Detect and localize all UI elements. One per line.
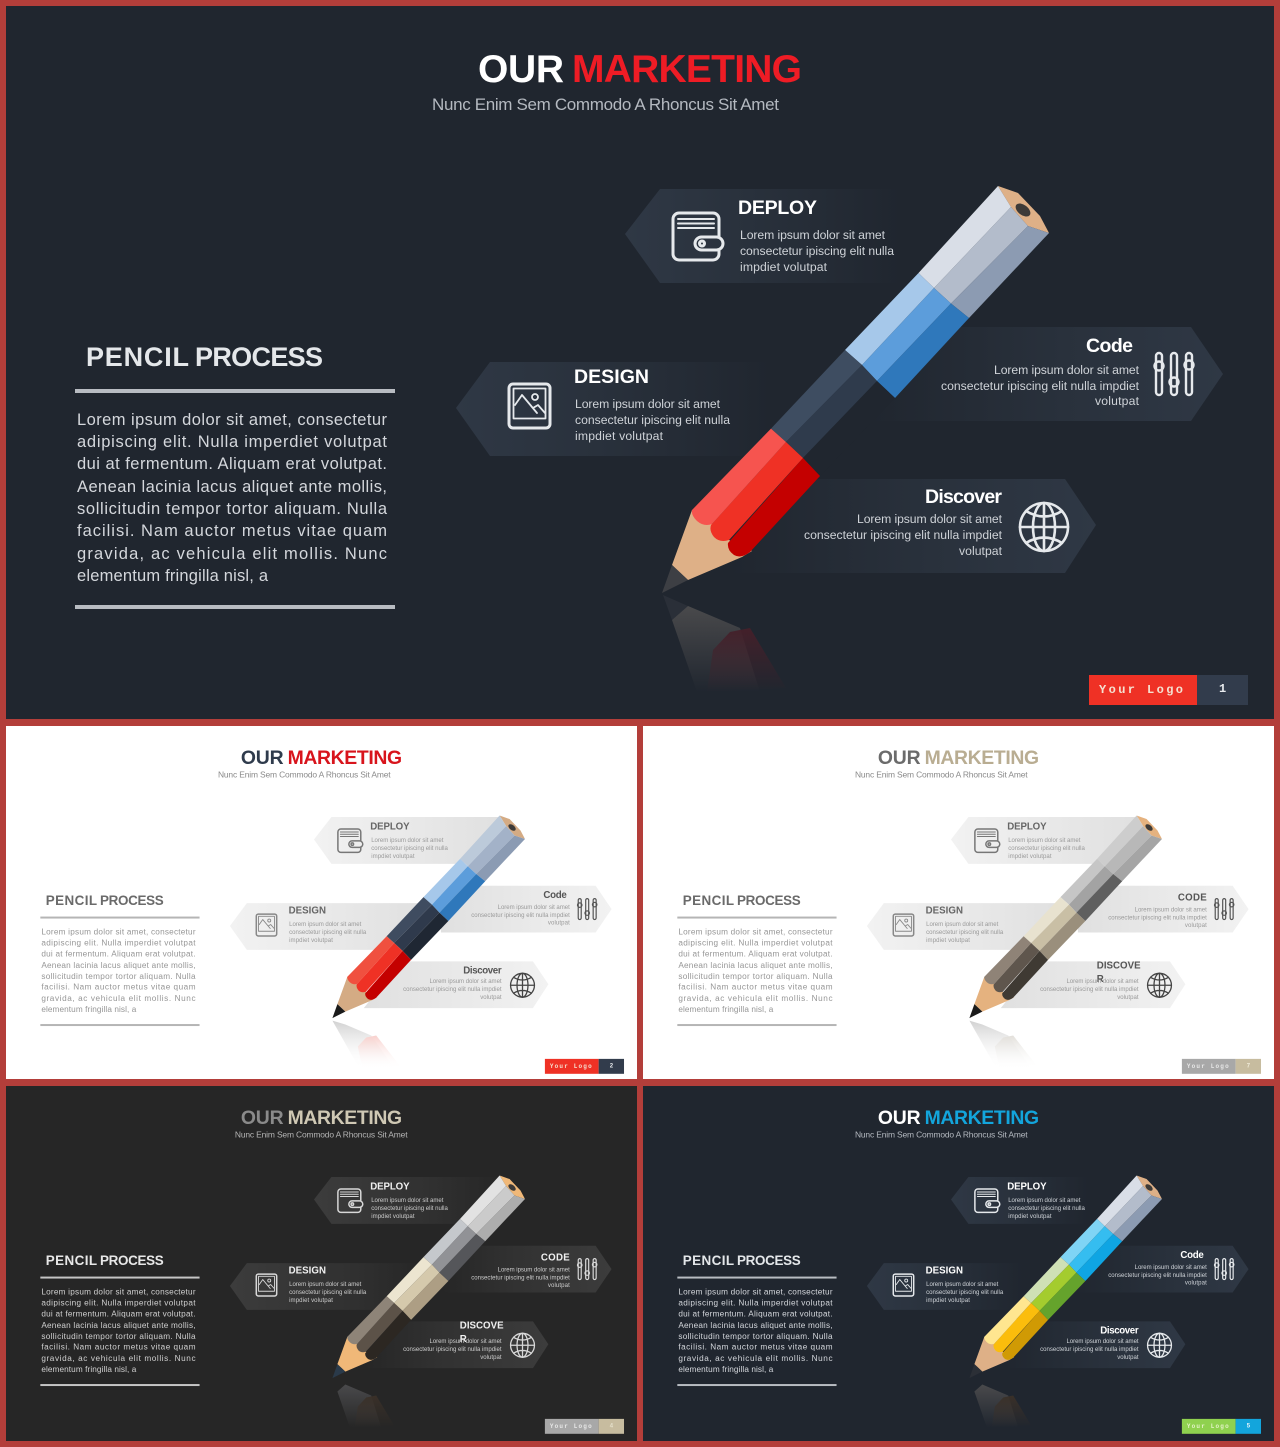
title: OUR (478, 48, 564, 91)
panel: discover: DISCOVE (1097, 960, 1141, 971)
text block: left description: facilisi. Nam auctor metus vitae quam (678, 1343, 833, 1352)
heading: pencil process (46, 893, 164, 908)
panel: code: Lorem ipsum dolor sit amet (994, 363, 1140, 377)
title: MARKETING (288, 747, 402, 769)
panel: design: consectetur ipiscing elit nulla (575, 413, 730, 427)
text block: left description: Aenean lacinia lacus aliquet ante mollis, (77, 478, 387, 496)
panel: code: Lorem ipsum dolor sit amet (498, 905, 570, 911)
panel: code: volutpat (548, 1283, 570, 1289)
icon: sliders (1214, 899, 1234, 920)
footer logo (545, 1419, 624, 1434)
text block: left description: elementum fringilla nisl, a (678, 1005, 774, 1014)
panel: deploy: DEPLOY (738, 197, 817, 219)
heading: pencil process: PENCIL (86, 342, 189, 372)
footer logo (545, 1059, 624, 1074)
text block: left description: sollicitudin tempor tortor aliquam. Nulla (41, 972, 196, 981)
panel: discover: consectetur ipiscing elit nulla impdiet (403, 1347, 502, 1353)
text block: left description: adipiscing elit. Nulla imperdiet volutpat (41, 1298, 196, 1307)
icon: wallet (338, 829, 363, 852)
panel: discover: volutpat (1117, 1355, 1139, 1361)
panel: design: DESIGN (926, 906, 963, 917)
text block: left description: dui at fermentum. Aliquam erat volutpat. (41, 1309, 196, 1318)
icon: picture (893, 1274, 914, 1296)
panel: discover: Discover (925, 486, 1002, 508)
text block: left description: elementum fringilla nisl, a (41, 1005, 137, 1014)
icon: wallet (673, 213, 723, 260)
pencil reflection (969, 1021, 1038, 1067)
panel: code: consectetur ipiscing elit nulla impdiet (471, 1276, 570, 1282)
text block: left description: facilisi. Nam auctor metus vitae quam (678, 983, 833, 992)
footer logo (1182, 1419, 1261, 1434)
footer logo (1089, 675, 1248, 705)
footer logo: 7 (1247, 1062, 1251, 1069)
panel: deploy: Lorem ipsum dolor sit amet (1008, 838, 1081, 844)
heading: pencil process: PENCIL (683, 1253, 734, 1268)
text block: left description: sollicitudin tempor tortor aliquam. Nulla (41, 1332, 196, 1341)
text block: left description: dui at fermentum. Aliquam erat volutpat. (77, 455, 387, 473)
panel: code: volutpat (1185, 923, 1207, 929)
title: MARKETING (925, 1107, 1039, 1129)
panel: discover: consectetur ipiscing elit nulla impdiet (1040, 987, 1139, 993)
panel: design (867, 1263, 1023, 1310)
pencil (969, 816, 1162, 1018)
pencil reflection (337, 1385, 394, 1427)
panel: deploy: DEPLOY (1007, 821, 1047, 832)
footer logo: 4 (610, 1422, 614, 1429)
text block: left description: elementum fringilla nisl, a (41, 1365, 137, 1374)
panel: deploy: Lorem ipsum dolor sit amet (1008, 1198, 1081, 1204)
heading: pencil process: PROCESS (195, 342, 323, 372)
panel: discover: Lorem ipsum dolor sit amet (429, 1339, 502, 1345)
text block: left description: adipiscing elit. Nulla imperdiet volutpat (678, 938, 833, 947)
panel: design: Lorem ipsum dolor sit amet (926, 1282, 999, 1288)
panel: discover: Lorem ipsum dolor sit amet (1066, 979, 1139, 985)
panel: design: DESIGN (574, 366, 649, 388)
text block: left description: Lorem ipsum dolor sit amet, consectetur (678, 927, 833, 936)
panel: code: consectetur ipiscing elit nulla impdiet (1108, 1273, 1207, 1279)
text block: left description: sollicitudin tempor tortor aliquam. Nulla (77, 500, 388, 518)
panel: discover: Discover (463, 965, 502, 976)
panel: design: consectetur ipiscing elit nulla (289, 930, 367, 936)
pencil (662, 186, 1049, 593)
panel: deploy: impdiet volutpat (1008, 854, 1052, 860)
panel: deploy: DEPLOY (1007, 1181, 1047, 1192)
panel: code: Code (1086, 335, 1133, 357)
panel: discover: Lorem ipsum dolor sit amet (1066, 1339, 1139, 1345)
icon: wallet (338, 1189, 363, 1212)
heading: pencil process (46, 1253, 164, 1268)
panel: deploy: impdiet volutpat (371, 854, 415, 860)
icon: globe (511, 973, 534, 997)
panel: discover: volutpat (959, 544, 1003, 558)
panel: deploy: Lorem ipsum dolor sit amet (371, 1198, 444, 1204)
text block: left description: adipiscing elit. Nulla imperdiet volutpat (678, 1298, 833, 1307)
title: OUR (878, 747, 921, 769)
panel: discover: volutpat (480, 995, 502, 1001)
panel: code (1078, 886, 1249, 932)
panel: code: consectetur ipiscing elit nulla impdiet (941, 379, 1140, 393)
text block: left description: elementum fringilla nisl, a (678, 1365, 774, 1374)
panel: code: Lorem ipsum dolor sit amet (1135, 1265, 1207, 1271)
icon: sliders (577, 1259, 597, 1280)
icon: wallet (975, 1189, 1000, 1212)
icon: globe (1020, 503, 1068, 551)
panel: design (230, 1263, 426, 1310)
text block: left description: elementum fringilla nisl, a (77, 567, 269, 585)
footer logo: 5 (1247, 1422, 1251, 1429)
title: OUR (878, 1107, 921, 1129)
icon: picture (509, 384, 550, 428)
heading: pencil process: PROCESS (100, 1253, 164, 1268)
panel: design: Lorem ipsum dolor sit amet (289, 922, 362, 928)
footer logo: Your Logo (550, 1063, 592, 1070)
panel: deploy: impdiet volutpat (1008, 1214, 1052, 1220)
heading: pencil process (683, 1253, 801, 1268)
text block: left description (40, 1277, 200, 1386)
subtitle: Nunc Enim Sem Commodo A Rhoncus Sit Amet (855, 1130, 1028, 1140)
icon: globe (1148, 973, 1171, 997)
panel: code: Lorem ipsum dolor sit amet (498, 1268, 570, 1274)
text block: left description: gravida, ac vehicula elit mollis. Nunc (41, 994, 196, 1003)
heading: pencil process (683, 893, 801, 908)
heading: pencil process: PENCIL (683, 893, 734, 908)
title: MARKETING (572, 48, 802, 91)
panel: code: consectetur ipiscing elit nulla impdiet (1108, 916, 1207, 922)
pencil reflection (663, 595, 786, 692)
text block: left description (677, 917, 837, 1026)
text block: left description: facilisi. Nam auctor metus vitae quam (77, 522, 387, 540)
panel: white slide, neutral pencil (643, 726, 1274, 1079)
panel: discover: Discover (1100, 1325, 1139, 1336)
footer logo: 2 (610, 1062, 614, 1069)
panel: deploy: Lorem ipsum dolor sit amet (740, 228, 886, 242)
panel: design: DESIGN (289, 1266, 326, 1277)
pencil (332, 816, 525, 1018)
heading: pencil process: PENCIL (46, 893, 97, 908)
panel: design: consectetur ipiscing elit nulla (926, 1290, 1004, 1296)
panel: deploy (951, 817, 1139, 864)
panel: deploy (314, 1177, 502, 1224)
title: OUR (241, 1107, 284, 1129)
panel: discover: DISCOVE (460, 1320, 504, 1331)
panel: design: DESIGN (926, 1266, 963, 1277)
icon: picture (256, 914, 277, 936)
panel: design: impdiet volutpat (575, 429, 664, 443)
subtitle: Nunc Enim Sem Commodo A Rhoncus Sit Amet (855, 770, 1028, 780)
text block: left description (40, 917, 200, 1026)
icon: sliders (1214, 1259, 1234, 1280)
heading: pencil process: PENCIL (46, 1253, 97, 1268)
pencil reflection (332, 1021, 401, 1067)
panel: design: impdiet volutpat (926, 1298, 970, 1304)
text block: left description: Lorem ipsum dolor sit amet, consectetur (41, 1287, 196, 1296)
subtitle: Nunc Enim Sem Commodo A Rhoncus Sit Amet (218, 770, 391, 780)
panel: code: Code (1180, 1250, 1204, 1261)
heading: pencil process: PROCESS (100, 893, 164, 908)
panel: discover: volutpat (480, 1355, 502, 1361)
footer logo: Your Logo (1099, 683, 1183, 697)
footer logo: Your Logo (550, 1423, 592, 1430)
panel: discover (1003, 1321, 1185, 1368)
panel: code (441, 1246, 612, 1292)
panel: discover: R (460, 1334, 467, 1345)
heading: pencil process: PROCESS (737, 893, 801, 908)
title: OUR (241, 747, 284, 769)
footer logo: Your Logo (1187, 1063, 1229, 1070)
text block: left description: sollicitudin tempor tortor aliquam. Nulla (678, 1332, 833, 1341)
text block: left description: facilisi. Nam auctor metus vitae quam (41, 983, 196, 992)
heading: pencil process: PROCESS (737, 1253, 801, 1268)
panel: discover (730, 479, 1096, 573)
panel: code: CODE (1178, 893, 1207, 904)
panel: code: consectetur ipiscing elit nulla impdiet (471, 913, 570, 919)
icon: picture (256, 1274, 277, 1296)
panel: design: consectetur ipiscing elit nulla (289, 1290, 367, 1296)
panel: deploy: consectetur ipiscing elit nulla (1008, 1206, 1085, 1212)
panel: discover: consectetur ipiscing elit nulla impdiet (1040, 1347, 1139, 1353)
panel: code: volutpat (1185, 1281, 1207, 1287)
panel: design: Lorem ipsum dolor sit amet (926, 922, 999, 928)
panel: design: impdiet volutpat (926, 938, 970, 944)
panel: code: Code (543, 890, 567, 901)
panel: deploy: DEPLOY (370, 1181, 410, 1192)
panel: discover: volutpat (1117, 995, 1139, 1001)
panel: deploy (625, 189, 900, 283)
panel: design (230, 903, 426, 950)
heading: pencil process (86, 342, 323, 372)
panel: design: consectetur ipiscing elit nulla (926, 930, 1004, 936)
icon: picture (893, 914, 914, 936)
text block: left description: gravida, ac vehicula elit mollis. Nunc (678, 994, 833, 1003)
panel: code (1073, 1246, 1249, 1292)
pencil (332, 1176, 525, 1378)
panel: deploy: Lorem ipsum dolor sit amet (371, 838, 444, 844)
panel: discover: consectetur ipiscing elit nulla impdiet (804, 528, 1003, 542)
text block: left description: gravida, ac vehicula elit mollis. Nunc (678, 1354, 833, 1363)
text block: left description: sollicitudin tempor tortor aliquam. Nulla (678, 972, 833, 981)
panel: design: impdiet volutpat (289, 938, 333, 944)
panel: deploy: consectetur ipiscing elit nulla (1008, 846, 1085, 852)
text block: left description: dui at fermentum. Aliquam erat volutpat. (678, 949, 833, 958)
text block: left description: gravida, ac vehicula elit mollis. Nunc (77, 545, 387, 563)
icon: wallet (975, 829, 1000, 852)
text block: left description: Lorem ipsum dolor sit amet, consectetur (678, 1287, 833, 1296)
panel: discover: R (1097, 974, 1104, 985)
panel: discover: Lorem ipsum dolor sit amet (857, 512, 1003, 526)
panel: white slide, red pencil (6, 726, 637, 1079)
text block: left description: Aenean lacinia lacus aliquet ante mollis, (678, 1321, 833, 1330)
panel: deploy (314, 817, 502, 864)
panel: discover (1001, 960, 1185, 1008)
text block: left description: adipiscing elit. Nulla imperdiet volutpat (41, 938, 196, 947)
text block: left description: Aenean lacinia lacus aliquet ante mollis, (41, 1321, 196, 1330)
text block: left description: Aenean lacinia lacus aliquet ante mollis, (678, 961, 833, 970)
text block: left description: dui at fermentum. Aliquam erat volutpat. (678, 1309, 833, 1318)
panel: deploy: impdiet volutpat (371, 1214, 415, 1220)
panel: code (870, 327, 1223, 421)
panel: code: volutpat (548, 921, 570, 927)
icon: globe (511, 1333, 534, 1357)
panel: deploy: consectetur ipiscing elit nulla (371, 846, 448, 852)
panel: discover: consectetur ipiscing elit nulla impdiet (403, 987, 502, 993)
footer logo: Your Logo (1187, 1423, 1229, 1430)
panel: deploy: impdiet volutpat (740, 260, 828, 274)
panel: code: CODE (541, 1253, 570, 1264)
subtitle: Nunc Enim Sem Commodo A Rhoncus Sit Amet (235, 1130, 408, 1140)
icon: sliders (1154, 353, 1194, 395)
text block: left description: gravida, ac vehicula elit mollis. Nunc (41, 1354, 196, 1363)
text block: left description: dui at fermentum. Aliquam erat volutpat. (41, 949, 196, 958)
pencil (969, 1176, 1162, 1378)
title: MARKETING (925, 747, 1039, 769)
panel: discover: Lorem ipsum dolor sit amet (429, 979, 502, 985)
icon: sliders (577, 899, 597, 920)
footer logo (1182, 1059, 1261, 1074)
title: MARKETING (288, 1107, 402, 1129)
panel: main navy slide (6, 6, 1274, 719)
panel: code: Lorem ipsum dolor sit amet (1135, 908, 1207, 914)
icon: globe (1148, 1333, 1171, 1357)
panel: design: Lorem ipsum dolor sit amet (575, 397, 721, 411)
text block: left description (75, 389, 395, 609)
panel: design: DESIGN (289, 906, 326, 917)
text block: left description: Aenean lacinia lacus aliquet ante mollis, (41, 961, 196, 970)
panel: discover (364, 1320, 548, 1368)
panel: deploy: consectetur ipiscing elit nulla (371, 1206, 448, 1212)
panel: deploy: DEPLOY (370, 821, 410, 832)
panel: code (441, 886, 612, 932)
subtitle: Nunc Enim Sem Commodo A Rhoncus Sit Amet (432, 95, 779, 114)
panel: charcoal slide, neutral pencil (6, 1086, 637, 1441)
text block: left description: facilisi. Nam auctor metus vitae quam (41, 1343, 196, 1352)
panel: deploy: consectetur ipiscing elit nulla (740, 244, 894, 258)
panel: deploy (951, 1177, 1088, 1224)
panel: design (867, 903, 1063, 950)
text block: left description (677, 1277, 837, 1386)
panel: navy slide, rainbow pencil (643, 1086, 1274, 1441)
pencil reflection (974, 1385, 1031, 1427)
panel: code: volutpat (1095, 394, 1140, 408)
panel: design: impdiet volutpat (289, 1298, 333, 1304)
text block: left description: Lorem ipsum dolor sit amet, consectetur (41, 927, 196, 936)
panel: design (456, 362, 770, 456)
panel: design: Lorem ipsum dolor sit amet (289, 1282, 362, 1288)
panel: discover (364, 961, 548, 1008)
text block: left description: Lorem ipsum dolor sit amet, consectetur (77, 411, 388, 429)
text block: left description: adipiscing elit. Nulla imperdiet volutpat (77, 433, 387, 451)
footer logo: 1 (1219, 682, 1226, 696)
